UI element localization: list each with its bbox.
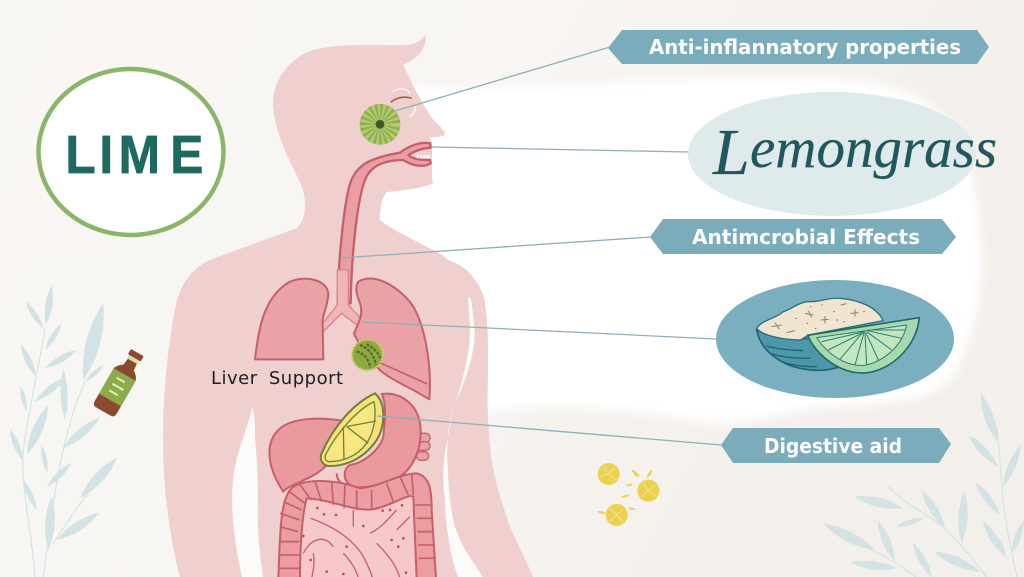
callout: Lemongrass: emongrass [750,117,997,180]
decoration: left plant [10,285,117,577]
icon: green herb [352,340,383,370]
small intestine [300,496,417,577]
colon [278,473,436,577]
label: digestive aid [721,428,951,463]
badge: LIME [38,69,224,235]
callout: Lemongrass [688,92,997,216]
title: LIME: LIME [65,124,203,184]
liver [269,419,342,492]
icon: small yellow fruits [597,463,659,526]
label: anti-inflammatory: Anti-inflannatory properties [649,35,961,59]
decoration: right plant [823,393,1024,577]
left lung [255,279,328,359]
connector lines [340,47,721,445]
label: anti-inflammatory [608,30,989,64]
intestine folds [303,510,410,577]
colon segments [279,474,435,568]
organ: trachea and mouth [338,143,431,303]
duodenum [337,473,357,492]
stomach [345,394,421,487]
powder [757,298,883,340]
label: liver support: Liver Support [211,368,344,389]
right lung [354,278,430,399]
label: antimicrobial effects: Antimcrobial Effects [692,225,920,249]
label: antimicrobial effects [650,219,956,254]
icon: bottle [92,346,148,418]
bronchi [323,270,361,332]
panel: bowl and lime wedge [716,280,954,398]
lime wedge [808,318,919,373]
label: digestive aid: Digestive aid [764,434,902,458]
callout: Lemongrass: L [713,116,750,189]
panel: human body silhouette [163,35,533,577]
white gap: right arm [443,298,483,577]
icon: lemon slice [321,393,383,466]
bowl [757,329,840,370]
icon: lime flower on face [360,104,400,145]
white gap: left arm [232,407,263,577]
eye and brow detail [391,89,415,117]
organs: lungs, liver, stomach and intestines [255,270,436,577]
stomach lobes [417,433,430,460]
